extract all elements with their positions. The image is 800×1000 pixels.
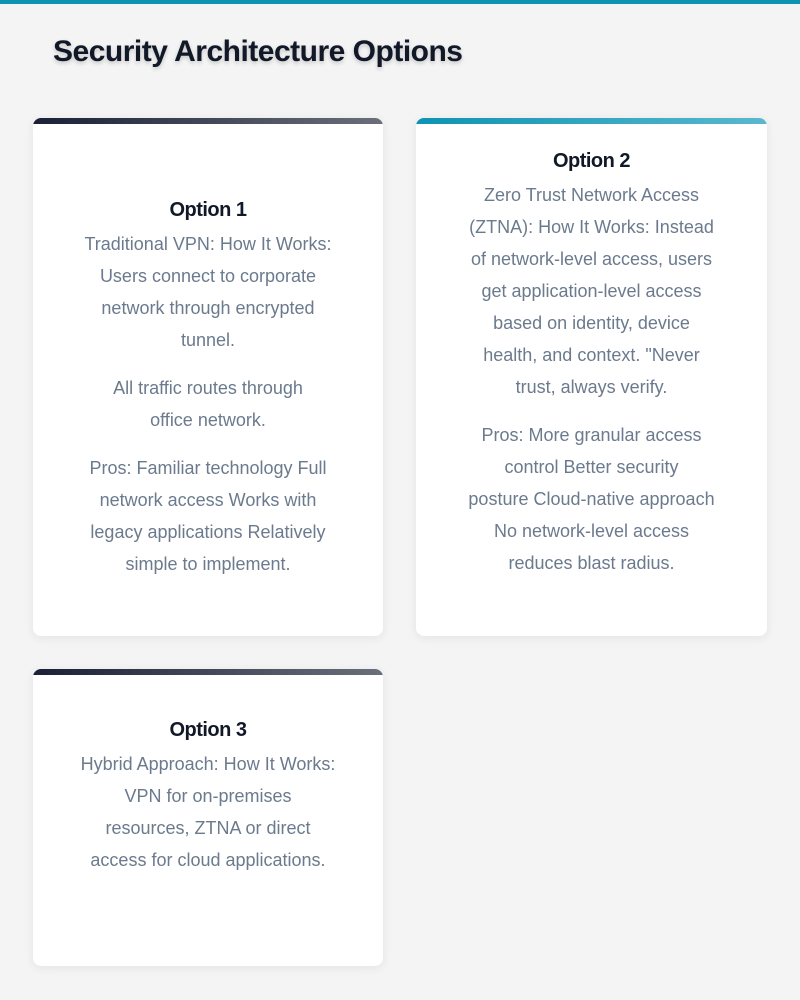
text: option 1 body: network through encrypted [101,298,315,318]
text: option 1 body: network access Works with [100,490,316,510]
panel: option 2 [416,118,767,636]
text: option 2 body: get application-level access [481,281,702,301]
text: option 2 body: health, and context. "Never [483,345,700,365]
heading: option 3: Option 3 [169,719,247,741]
text: option 3 body: VPN for on-premises [124,786,292,806]
text: option 2 body: based on identity, device [493,313,690,333]
title: Security Architecture Options [53,35,462,68]
text: option 3 body [81,754,335,870]
text: option 1 body: office network. [150,410,266,430]
text: option 1 body: tunnel. [181,330,235,350]
text: option 1 body: Traditional VPN: How It Works: [84,234,332,254]
heading: option 1: Option 1 [169,199,247,221]
text: option 2 body: posture Cloud-native approach [468,489,715,509]
text: option 1 body [84,234,332,574]
heading: option 2: Option 2 [553,150,630,172]
text: option 2 body: of network-level access, users [471,249,712,269]
text: option 2 body: (ZTNA): How It Works: Instead [469,217,714,237]
text: option 2 body: reduces blast radius. [508,553,675,573]
text: option 2 body [468,185,715,573]
text: option 2 body: No network-level access [494,521,689,541]
text: option 2 body: Pros: More granular access [481,425,702,445]
text: option 2 body: control Better security [504,457,679,477]
text: option 2 body: trust, always verify. [516,377,667,397]
panel: option 1 [33,118,383,636]
text: option 1 body: All traffic routes through [113,378,303,398]
text: option 2 body: Zero Trust Network Access [484,185,699,205]
text: option 3 body: resources, ZTNA or direct [105,818,311,838]
text: option 1 body: simple to implement. [125,554,291,574]
text: option 1 body: legacy applications Relatively [90,522,326,542]
text: option 1 body: Users connect to corporate [100,266,316,286]
panel: option 3 [33,669,383,966]
text: option 3 body: Hybrid Approach: How It Works: [81,754,335,774]
text: option 1 body: Pros: Familiar technology Full [89,458,327,478]
text: option 3 body: access for cloud applications. [90,850,326,870]
